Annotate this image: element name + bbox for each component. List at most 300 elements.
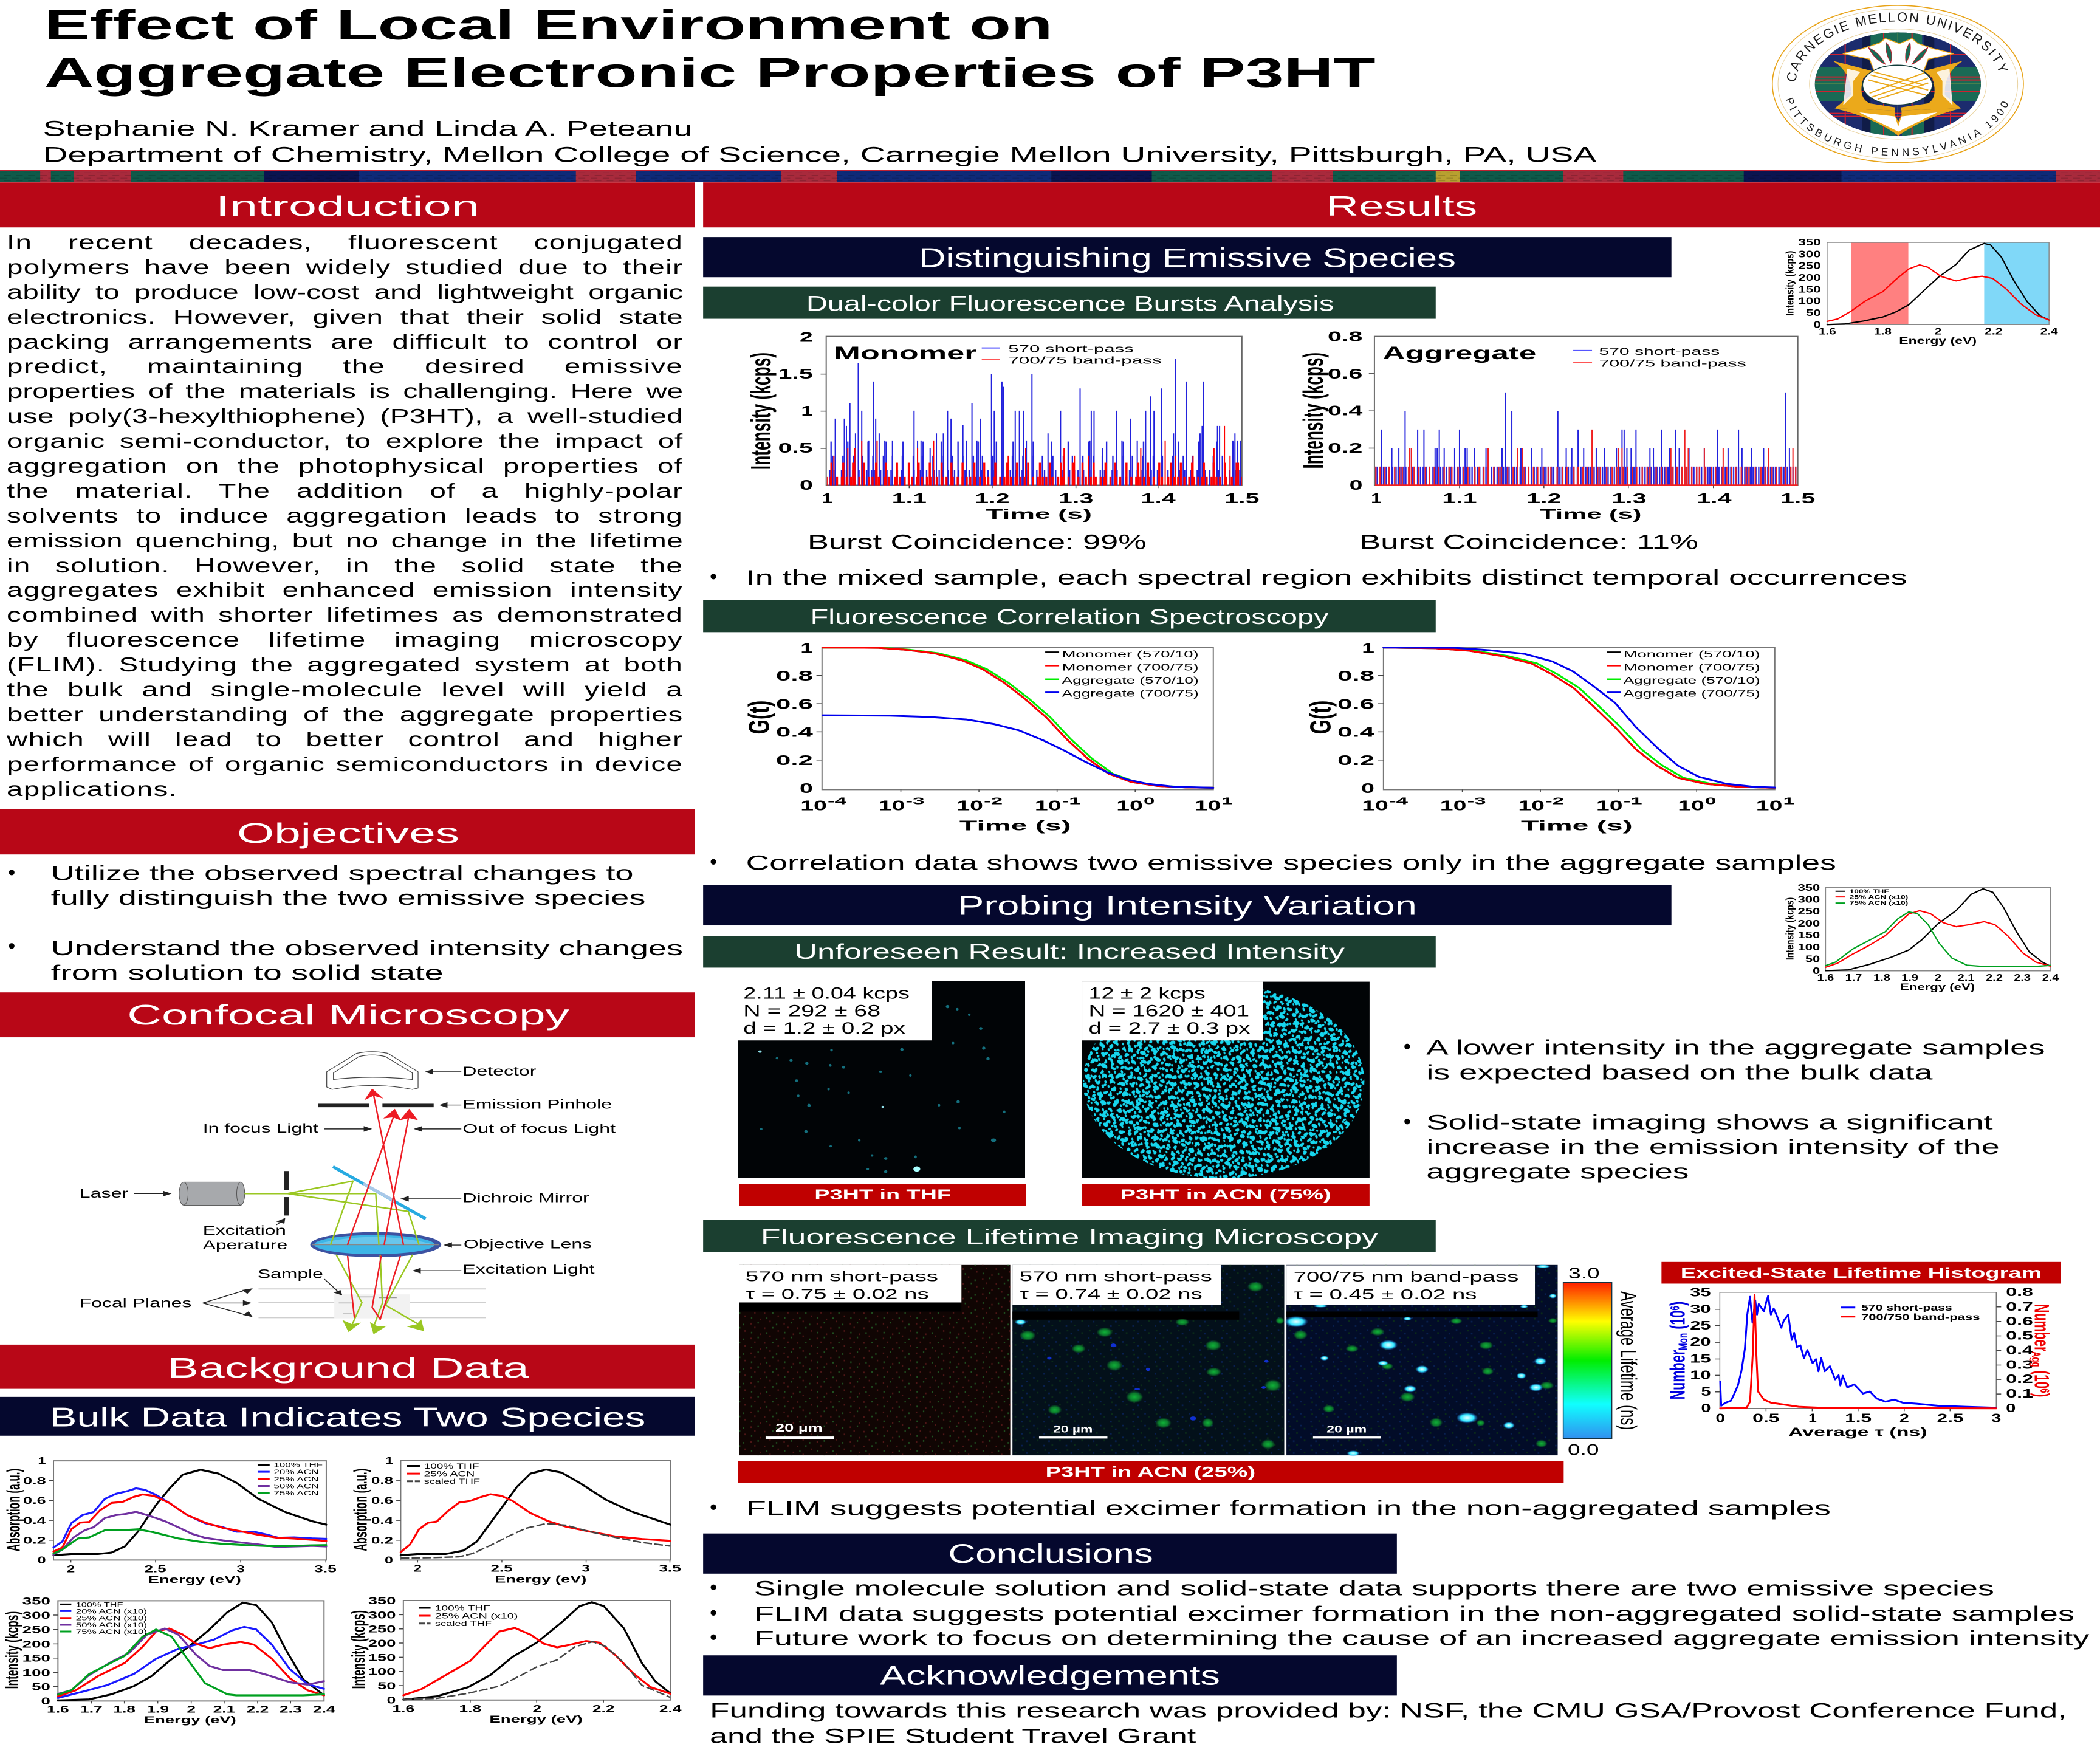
- chart: emission series: 350: [22, 1596, 50, 1607]
- diagram labels and pointers: Aperature: [203, 1238, 287, 1252]
- chart: spectral windows inset: 200: [1798, 273, 1821, 283]
- heading: Conclusions: [703, 1534, 1397, 1574]
- chart: aggregate correlation: 1: [1362, 640, 1374, 656]
- chart: monomer bursts: Intensity (kcps): [746, 352, 777, 470]
- subheading: Fluorescence Correlation Spectroscopy: Fluorescence Correlation Spectroscopy: [810, 605, 1329, 629]
- chart: monomer correlation: -1: [1062, 796, 1081, 806]
- chart: aggregate correlation: 0: [1361, 780, 1374, 796]
- chart: monomer bursts: Monomer: [834, 343, 977, 363]
- subheading: Distinguishing Emissive Species: Distinguishing Emissive Species: [919, 244, 1456, 273]
- logo: Carnegie Mellon University seal: CARNEGIE MELLON UNIVERSITY: [1787, 12, 2008, 81]
- image: FLIM panel 3: τ = 0.45 ± 0.02 ns: [1294, 1286, 1477, 1302]
- text block: intensity findings: Solid-state imaging shows a significant: [1426, 1111, 1993, 1134]
- chart: emission series: 20% ACN (x10): [76, 1607, 147, 1615]
- chart: aggregate correlation: 0.2: [1337, 752, 1374, 768]
- chart: monomer correlation: 0: [800, 780, 813, 796]
- chart: absorption THF vs 25% ACN: 0.8: [371, 1475, 393, 1486]
- introduction text block: aggregation on the photophysical properties of: [7, 455, 683, 477]
- subheading: Distinguishing Emissive Species: [703, 237, 1672, 277]
- chart: excited-state lifetime histogram: (10: [1666, 1311, 1689, 1333]
- chart: monomer bursts: 1.5: [778, 366, 813, 382]
- chart: excited-state lifetime histogram: 2: [1899, 1412, 1909, 1425]
- laser: [179, 1182, 245, 1206]
- diagram labels and pointers: Laser: [80, 1187, 128, 1201]
- caption: P3HT in ACN 75%: [1082, 1184, 1370, 1206]
- objectives bullet list: Understand the observed intensity changes: [51, 937, 683, 960]
- chart: monomer correlation: -3: [906, 796, 925, 806]
- chart: excited-state lifetime histogram: (10: [2030, 1367, 2053, 1388]
- subheading: Probing Intensity Variation: [703, 885, 1672, 925]
- introduction text block: organic semi-conductor, to explore the impact of: [7, 430, 683, 452]
- panel heading: Results: [703, 182, 2100, 227]
- chart: emission comparison inset: 2.2: [1986, 973, 2003, 983]
- subheading: Unforeseen Result: Unforeseen Result: Increased Intensity: [794, 940, 1345, 964]
- chart: excited-state lifetime histogram: Mon: [1676, 1333, 1690, 1350]
- chart: emission series: 1.8: [113, 1704, 136, 1715]
- chart: monomer correlation: 0.6: [776, 696, 813, 712]
- introduction text block: predict, maintaining the desired emissive: [7, 355, 683, 377]
- annotation: ACN statistics: 12 ± 2 kcps: [1089, 984, 1206, 1002]
- chart: absorption THF vs 25% ACN: 1: [385, 1455, 393, 1466]
- title: Effect of Local Environment on: [44, 1, 1052, 49]
- annotation: ACN statistics: d = 2.7 ± 0.3 px: [1089, 1019, 1250, 1037]
- caption: P3HT in ACN 25%: [738, 1461, 1563, 1483]
- chart: aggregate bursts: 0.4: [1328, 402, 1362, 419]
- chart: emission series: 0: [41, 1695, 50, 1707]
- chart: aggregate correlation: 0.4: [1337, 724, 1374, 740]
- chart: absorption THF vs 25% ACN: 0.6: [371, 1495, 393, 1506]
- introduction text block: properties of the materials is challenging. Here we: [7, 380, 683, 402]
- chart: emission THF vs 25% ACN: scaled THF: [435, 1620, 492, 1628]
- burst coincidence captions: Burst Coincidence: 11%: [1359, 531, 1698, 554]
- chart: emission THF vs 25% ACN: Energy (eV): [489, 1714, 583, 1725]
- introduction text block: the material. The addition of a highly-polar: [7, 479, 683, 502]
- chart: absorption series: 20% ACN: [273, 1468, 318, 1475]
- authors and affiliation: [43, 117, 1597, 167]
- chart: absorption series: 75% ACN: [273, 1489, 318, 1497]
- text block: intensity findings: is expected based on the bulk data: [1426, 1061, 1932, 1084]
- chart: absorption THF vs 25% ACN: 0.2: [371, 1535, 393, 1546]
- chart: emission THF vs 25% ACN: 300: [368, 1610, 396, 1621]
- chart: spectral windows inset: 2.4: [2040, 327, 2058, 337]
- chart: absorption THF vs 25% ACN: 100% THF: [424, 1463, 479, 1470]
- chart: monomer bursts: 1.4: [1141, 490, 1176, 506]
- panel heading: Objectives: Objectives: [237, 817, 459, 849]
- diagram labels and pointers: Objective Lens: [464, 1237, 592, 1251]
- chart: absorption THF vs 25% ACN: [351, 1455, 681, 1585]
- chart: excited-state lifetime histogram: 0: [1701, 1401, 1711, 1415]
- chart: monomer correlation: 1: [800, 640, 813, 656]
- chart: monomer correlation: Monomer (570/10): [1062, 649, 1199, 659]
- diagram labels and pointers: Excitation Light: [462, 1263, 595, 1277]
- subheading: Fluorescence Correlation Spectroscopy: [703, 600, 1436, 632]
- chart: monomer bursts: 2: [800, 329, 813, 345]
- chart: excited-state lifetime histogram: 0.5: [2006, 1329, 2033, 1342]
- chart: excited-state lifetime histogram: 0.8: [2006, 1285, 2033, 1299]
- annotation: THF statistics: N = 292 ± 68: [743, 1002, 880, 1020]
- conclusions bullet list: •: [710, 1576, 717, 1599]
- chart: aggregate correlation: 0.6: [1337, 696, 1374, 712]
- introduction text block: electronics. However, given that their solid state: [7, 306, 683, 328]
- chart: monomer bursts: 700/75 band-pass: [1008, 355, 1162, 366]
- subheading: Probing Intensity Variation: Probing Intensity Variation: [958, 891, 1417, 921]
- panel heading: Confocal Microscopy: Confocal Microscopy: [127, 999, 570, 1031]
- chart: emission comparison inset: 2.3: [2014, 973, 2031, 983]
- chart: emission THF vs 25% ACN: 150: [368, 1652, 396, 1663]
- chart: aggregate bursts: 1.1: [1442, 490, 1477, 506]
- panel heading: Objectives: [0, 809, 695, 854]
- chart: emission series: 2.4: [313, 1704, 335, 1715]
- dichroic mirror: [333, 1167, 426, 1219]
- chart: aggregate correlation: 1: [1783, 796, 1794, 806]
- chart: excited-state lifetime histogram: 3: [1991, 1412, 2001, 1425]
- chart: excited-state lifetime histogram: 0: [1716, 1412, 1725, 1425]
- chart: absorption THF vs 25% ACN: 0.4: [371, 1515, 393, 1526]
- chart: spectral windows inset: [1783, 238, 2058, 346]
- chart: aggregate bursts: Intensity (kcps): [1298, 352, 1330, 469]
- chart: emission series: 250: [22, 1624, 50, 1636]
- chart: emission comparison inset: 75% ACN (x10): [1850, 900, 1908, 907]
- chart: emission series: 2.3: [280, 1704, 302, 1715]
- chart: absorption series: 3.5: [314, 1563, 337, 1575]
- chart: excited-state lifetime histogram: Agg: [2029, 1351, 2044, 1367]
- chart: excited-state lifetime histogram: 0.3: [2006, 1358, 2033, 1371]
- chart: monomer correlation: -2: [984, 796, 1003, 806]
- chart: excited-state lifetime histogram: Number: [1666, 1354, 1689, 1399]
- subheading: Bulk Data Indicates Two Species: [0, 1397, 695, 1436]
- introduction text block: the bulk and single-molecule level will yield a: [7, 678, 683, 701]
- image: FLIM panel 2: [1012, 1265, 1285, 1455]
- diagram labels and pointers: [80, 1064, 616, 1317]
- text block: intensity findings: aggregate species: [1426, 1161, 1689, 1184]
- chart: emission series: 2: [187, 1704, 196, 1715]
- image: FLIM panel 2: τ = 0.74 ± 0.02 ns: [1020, 1286, 1203, 1302]
- chart: emission THF vs 25% ACN: 2: [533, 1703, 541, 1714]
- chart: spectral windows inset: 50: [1806, 308, 1821, 318]
- chart: spectral windows inset: 2.2: [1985, 327, 2003, 337]
- chart: aggregate bursts: 700/75 band-pass: [1599, 357, 1746, 369]
- chart: excited-state lifetime histogram: 0.4: [2006, 1343, 2033, 1357]
- chart: monomer correlation: 10: [879, 797, 905, 813]
- panel heading: Introduction: [0, 182, 695, 227]
- chart: absorption THF vs 25% ACN: 0: [385, 1554, 393, 1566]
- image: FLIM panel 1: 570 nm short-pass: [746, 1268, 938, 1284]
- chart: emission THF vs 25% ACN: 1.8: [459, 1703, 481, 1714]
- chart: emission series: 2.2: [247, 1704, 269, 1715]
- chart: absorption series: 3: [237, 1563, 245, 1575]
- diagram labels and pointers: Dichroic Mirror: [462, 1191, 589, 1206]
- chart: emission comparison inset: 2: [1935, 973, 1941, 983]
- introduction text block: by fluorescence lifetime imaging microscopy: [7, 628, 683, 651]
- chart: monomer correlation: 1: [1222, 796, 1233, 806]
- panel heading: Introduction: Introduction: [216, 190, 479, 222]
- chart: emission comparison inset: 2.4: [2042, 973, 2059, 983]
- bullet: correlation data: •: [710, 850, 717, 873]
- panel heading: Confocal Microscopy: [0, 992, 695, 1037]
- chart: absorption THF vs 25% ACN: 3: [582, 1563, 589, 1574]
- chart: emission series: 25% ACN (x10): [76, 1614, 147, 1622]
- arrowheads: [342, 1088, 424, 1334]
- chart: aggregate bursts: 1.2: [1526, 490, 1562, 506]
- chart: emission THF vs 25% ACN: 25% ACN (x10): [435, 1612, 518, 1620]
- chart: emission comparison inset: 25% ACN (x10): [1850, 894, 1908, 901]
- chart: absorption series: [3, 1455, 337, 1585]
- FLIM image panels: [738, 1264, 1563, 1483]
- objectives bullet list: fully distinguish the two emissive species: [51, 887, 645, 910]
- chart: emission series: 100% THF: [76, 1601, 123, 1608]
- chart: absorption series: 25% ACN: [273, 1475, 318, 1483]
- chart: monomer correlation: 10: [1035, 797, 1062, 813]
- conclusions bullet list: Future work to focus on determining the cause of an increased aggregate emission intensity: [754, 1627, 2090, 1650]
- chart: excited-state lifetime histogram: 0: [2006, 1401, 2016, 1415]
- chart: absorption series: 1: [38, 1455, 46, 1467]
- logo: Carnegie Mellon University seal: PITTSBURGH PENNSYLVANIA 1900: [1786, 97, 2008, 156]
- lifetime colour bar: 0.0: [1568, 1441, 1599, 1458]
- chart: emission comparison inset: 2.1: [1958, 973, 1975, 983]
- chart: absorption series: 0.2: [23, 1535, 46, 1546]
- correlation charts: [743, 640, 1794, 834]
- chart: emission comparison inset: 100: [1798, 942, 1820, 953]
- chart: absorption THF vs 25% ACN: scaled THF: [424, 1478, 480, 1486]
- chart: excited-state lifetime histogram: ): [1666, 1302, 1689, 1306]
- chart: aggregate bursts: 0.8: [1328, 328, 1362, 345]
- chart: aggregate bursts: 1.5: [1780, 490, 1815, 506]
- chart: absorption series: 0.6: [23, 1495, 46, 1506]
- chart: aggregate correlation: Aggregate (700/75): [1624, 688, 1760, 699]
- chart: spectral windows inset: 250: [1798, 261, 1821, 272]
- annotation: THF statistics: d = 1.2 ± 0.2 px: [743, 1019, 905, 1037]
- chart: aggregate bursts: Time (s): [1540, 506, 1642, 522]
- heading: Conclusions: Conclusions: [948, 1539, 1153, 1569]
- chart: aggregate correlation: -3: [1467, 796, 1486, 806]
- image: FLIM panel 2: 20 µm: [1053, 1424, 1093, 1435]
- chart: aggregate correlation: -4: [1389, 796, 1408, 806]
- chart: spectral windows inset: Energy (eV): [1899, 336, 1977, 346]
- chart: spectral windows inset: 2: [1935, 327, 1941, 337]
- bullet: correlation data: Correlation data shows two emissive species only in the aggregate samples: [746, 852, 1836, 875]
- lifetime colour bar: Average Lifetime (ns): [1616, 1291, 1641, 1430]
- chart: emission series: 2.1: [213, 1704, 235, 1715]
- chart: aggregate correlation: 0: [1705, 796, 1716, 806]
- histogram heading: [1661, 1262, 2061, 1283]
- chart: emission THF vs 25% ACN: 100% THF: [435, 1604, 490, 1612]
- chart: absorption THF vs 25% ACN: 25% ACN: [424, 1470, 475, 1478]
- introduction text block: aggregates exhibit enhanced emission intensity: [7, 578, 683, 601]
- introduction text block: solvents to induce aggregation leads to strong: [7, 504, 683, 527]
- title: Aggregate Electronic Properties of P3HT: [44, 49, 1376, 96]
- chart: aggregate bursts: Aggregate: [1383, 343, 1536, 363]
- introduction text block: performance of organic semiconductors in device: [7, 753, 683, 775]
- image: FLIM panel 1: τ = 0.75 ± 0.02 ns: [746, 1286, 929, 1302]
- chart: aggregate bursts: [1298, 328, 1815, 522]
- chart: excited-state lifetime histogram: 5: [1701, 1385, 1711, 1398]
- introduction text block: polymers have been widely studied due to their: [7, 256, 683, 278]
- chart: absorption THF vs 25% ACN: 2: [414, 1563, 422, 1574]
- subheading: Unforeseen Result: [703, 936, 1436, 967]
- subheading: Dual-color Fluorescence Bursts Analysis: [703, 287, 1436, 319]
- chart: aggregate correlation: 10: [1518, 797, 1545, 813]
- chart: emission series: 50% ACN (x10): [76, 1621, 147, 1628]
- chart: absorption THF vs 25% ACN: Energy (eV): [495, 1574, 586, 1585]
- chart: monomer bursts: [746, 329, 1260, 522]
- chart: spectral windows inset: 150: [1798, 285, 1821, 295]
- chart: excited-state lifetime histogram: [1661, 1262, 2061, 1439]
- chart: emission series: 1.9: [146, 1704, 169, 1715]
- chart: excited-state lifetime histogram: 6: [1667, 1306, 1682, 1311]
- chart: absorption series: 50% ACN: [273, 1482, 318, 1490]
- chart: emission comparison inset: 1.9: [1901, 973, 1918, 983]
- chart: emission comparison inset: 250: [1798, 907, 1820, 917]
- chart: monomer correlation: 10: [800, 797, 827, 813]
- excitation aperture: [284, 1171, 289, 1215]
- image: P3HT in ACN 75% single molecule image: [1081, 982, 1370, 1179]
- title: [44, 1, 1376, 96]
- chart: excited-state lifetime histogram: 0.1: [2006, 1387, 2033, 1400]
- conclusions bullet list: •: [710, 1626, 717, 1649]
- caption: P3HT in ACN 25%: P3HT in ACN (25%): [1046, 1464, 1255, 1480]
- chart: aggregate correlation: 10: [1678, 797, 1704, 813]
- chart: excited-state lifetime histogram: 25: [1690, 1319, 1711, 1332]
- chart: absorption series: 100% THF: [273, 1461, 323, 1469]
- chart: excited-state lifetime histogram: 0.2: [2006, 1372, 2033, 1385]
- chart: monomer correlation: Monomer (700/75): [1062, 662, 1199, 673]
- chart: emission series: 200: [22, 1639, 50, 1650]
- diagram labels and pointers: In focus Light: [203, 1121, 318, 1136]
- chart: emission THF vs 25% ACN: Intensity (kcps): [348, 1610, 369, 1689]
- chart: spectral windows inset: 1.6: [1819, 327, 1836, 337]
- introduction text block: applications.: [7, 778, 177, 800]
- chart: absorption series: 0: [38, 1554, 46, 1566]
- bullet: FLIM excimer: [710, 1495, 1831, 1520]
- diagram labels and pointers: Detector: [462, 1064, 536, 1079]
- subheading: Dual-color Fluorescence Bursts Analysis: Dual-color Fluorescence Bursts Analysis: [806, 292, 1334, 315]
- diagram labels and pointers: Emission Pinhole: [462, 1097, 612, 1112]
- authors and affiliation: Department of Chemistry, Mellon College of Science, Carnegie Mellon University, Pittsburgh, PA, USA: [43, 143, 1597, 167]
- chart: monomer bursts: 1.2: [975, 490, 1010, 506]
- chart: monomer correlation: 10: [956, 797, 983, 813]
- conclusions bullet list: FLIM data suggests potential excimer formation in the non-aggregated solid-state samples: [754, 1602, 2074, 1625]
- chart: emission THF vs 25% ACN: 200: [368, 1638, 396, 1649]
- chart: monomer bursts: 0.5: [778, 440, 813, 456]
- image: FLIM panel 1: [739, 1265, 1011, 1455]
- introduction text block: in solution. However, in the solid state the: [7, 554, 683, 577]
- chart: spectral windows inset: 350: [1798, 238, 1821, 248]
- chart: emission THF vs 25% ACN: 100: [368, 1666, 396, 1678]
- chart: aggregate correlation: 10: [1440, 797, 1466, 813]
- subheading: Fluorescence Lifetime Imaging Microscopy: Fluorescence Lifetime Imaging Microscopy: [761, 1226, 1379, 1249]
- chart: monomer bursts: 1.3: [1059, 490, 1093, 506]
- chart: excited-state lifetime histogram: Number: [2030, 1304, 2053, 1350]
- chart: absorption series: 0.4: [23, 1515, 46, 1526]
- chart: emission series: 50: [32, 1681, 50, 1693]
- panel heading: Background Data: Background Data: [168, 1352, 529, 1384]
- excitation light rays: [245, 1181, 421, 1327]
- authors and affiliation: Stephanie N. Kramer and Linda A. Peteanu: [43, 117, 693, 140]
- chart: emission THF vs 25% ACN: 2.4: [659, 1703, 682, 1714]
- chart: monomer correlation: 0.4: [776, 724, 813, 740]
- chart: emission comparison inset: 200: [1798, 919, 1820, 929]
- bullet: mixed sample: [710, 565, 1907, 589]
- chart: emission series: 1.7: [80, 1704, 103, 1715]
- objectives bullet list: from solution to solid state: [51, 961, 444, 984]
- introduction text block: better understanding of the aggregate properties: [7, 703, 683, 726]
- chart: emission THF vs 25% ACN: 2.2: [592, 1703, 615, 1714]
- chart: monomer bursts: 1: [801, 403, 813, 419]
- annotation: THF statistics: 2.11 ± 0.04 kcps: [743, 984, 910, 1002]
- objectives bullet list: •: [8, 935, 15, 958]
- chart: excited-state lifetime histogram: 6: [2037, 1388, 2052, 1393]
- chart: monomer bursts: 0: [800, 477, 813, 493]
- chart: aggregate correlation: -2: [1545, 796, 1564, 806]
- diagram labels and pointers: Out of focus Light: [462, 1122, 616, 1136]
- chart: excited-state lifetime histogram: 20: [1690, 1335, 1711, 1348]
- chart: monomer bursts: 1.5: [1224, 490, 1260, 506]
- diagram labels and pointers: Focal Planes: [80, 1296, 191, 1311]
- chart: emission comparison inset: 0: [1813, 966, 1820, 976]
- chart: aggregate correlation: 10: [1362, 797, 1388, 813]
- chart: excited-state lifetime histogram: 10: [1690, 1368, 1711, 1382]
- chart: spectral windows inset: 0: [1814, 320, 1821, 330]
- heading: Acknowledgements: Acknowledgements: [880, 1661, 1220, 1691]
- annotation: ACN statistics: [1082, 982, 1263, 1040]
- chart: emission series: [2, 1596, 335, 1726]
- chart: monomer correlation: 0: [1144, 796, 1155, 806]
- caption: P3HT in THF: [739, 1184, 1026, 1206]
- annotation: THF statistics: [738, 981, 932, 1040]
- chart: aggregate bursts: 1.4: [1697, 490, 1732, 506]
- chart: emission THF vs 25% ACN: 350: [368, 1595, 396, 1607]
- chart: absorption THF vs 25% ACN: Absorption (a.u.): [351, 1469, 371, 1551]
- chart: emission comparison inset: Energy (eV): [1900, 983, 1975, 992]
- logo: Carnegie Mellon University seal: [1772, 5, 2024, 163]
- chart: emission comparison inset: [1783, 883, 2059, 992]
- chart: emission series: 1.6: [47, 1704, 69, 1715]
- focal planes and sample: [258, 1289, 486, 1318]
- introduction text block: [7, 231, 683, 800]
- chart: emission series: Intensity (kcps): [2, 1611, 23, 1689]
- chart: aggregate bursts: 1.3: [1611, 490, 1647, 506]
- burst coincidence captions: [808, 531, 1698, 554]
- chart: aggregate correlation: [1304, 640, 1794, 834]
- chart: excited-state lifetime histogram: Average τ (ns): [1788, 1426, 1927, 1439]
- subheading: Fluorescence Lifetime Imaging Microscopy: [703, 1220, 1436, 1252]
- chart: monomer correlation: Time (s): [959, 817, 1071, 834]
- histogram heading: Excited-State Lifetime Histogram: [1681, 1265, 2042, 1282]
- chart: aggregate correlation: -1: [1624, 796, 1642, 806]
- chart: excited-state lifetime histogram: 1: [1808, 1412, 1817, 1425]
- diagram labels and pointers: Sample: [258, 1267, 323, 1281]
- chart: emission series: 150: [22, 1653, 50, 1664]
- chart: excited-state lifetime histogram: 0.5: [1752, 1412, 1780, 1425]
- acknowledgements text: [710, 1699, 2067, 1748]
- caption: P3HT in THF: P3HT in THF: [814, 1187, 951, 1203]
- introduction text block: (FLIM). Studying the aggregated system at both: [7, 653, 683, 676]
- chart: aggregate correlation: 0.8: [1337, 668, 1374, 684]
- chart: aggregate bursts: 0.6: [1328, 366, 1362, 382]
- chart: absorption series: Energy (eV): [148, 1574, 241, 1585]
- text block: intensity findings: •: [1404, 1035, 1411, 1059]
- chart: excited-state lifetime histogram: 35: [1690, 1286, 1711, 1299]
- bullet: correlation data: [710, 850, 1836, 875]
- chart: monomer bursts: 1.1: [892, 490, 927, 506]
- background data charts: [2, 1455, 682, 1726]
- chart: emission THF vs 25% ACN: 50: [377, 1680, 396, 1692]
- chart: aggregate correlation: 10: [1596, 797, 1623, 813]
- chart: monomer correlation: 0.8: [776, 668, 813, 684]
- emission pinhole: [318, 1103, 434, 1107]
- chart: emission THF vs 25% ACN: 1.6: [392, 1703, 414, 1714]
- introduction text block: which will lead to better control and higher: [7, 728, 683, 750]
